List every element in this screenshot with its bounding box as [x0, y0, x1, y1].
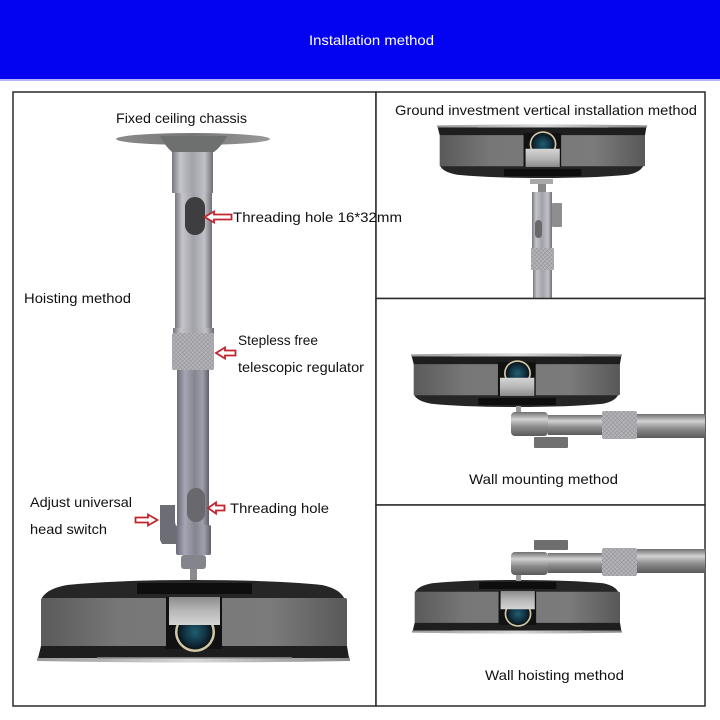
label: adjust universal: Adjust universal — [30, 494, 132, 510]
label: telescopic regulator: telescopic regulator — [238, 359, 364, 375]
projector — [412, 580, 622, 634]
arrow: universal head switch — [136, 514, 158, 526]
panel: ground vertical installation — [376, 92, 705, 298]
label: ground investment vertical installation method: Ground investment vertical installation method — [395, 102, 697, 118]
panel: wall mounting — [376, 298, 705, 505]
header title: Installation method — [309, 32, 434, 48]
projector — [411, 353, 622, 407]
label: stepless free: Stepless free — [238, 332, 318, 348]
label: threading hole: Threading hole — [230, 500, 329, 516]
label: wall mounting method: Wall mounting method — [469, 471, 618, 487]
pole — [530, 179, 562, 298]
label: hoisting method: Hoisting method — [24, 290, 131, 306]
projector — [437, 124, 647, 178]
projector — [37, 580, 350, 662]
panel: hoisting method — [13, 92, 376, 706]
horizontal pole — [511, 540, 705, 581]
arrow: threading hole — [204, 212, 232, 222]
horizontal pole — [511, 406, 705, 448]
ceiling mount pole — [116, 133, 270, 581]
label: head switch: head switch — [30, 521, 107, 537]
label: threading hole size: Threading hole 16*32mm — [233, 209, 402, 225]
label: fixed ceiling chassis: Fixed ceiling chassis — [116, 110, 247, 126]
label: wall hoisting method: Wall hoisting method — [485, 667, 624, 683]
header band — [0, 0, 720, 81]
arrow: lower threading hole — [208, 502, 224, 514]
panel: wall hoisting — [376, 505, 705, 706]
arrow: regulator — [216, 348, 236, 358]
